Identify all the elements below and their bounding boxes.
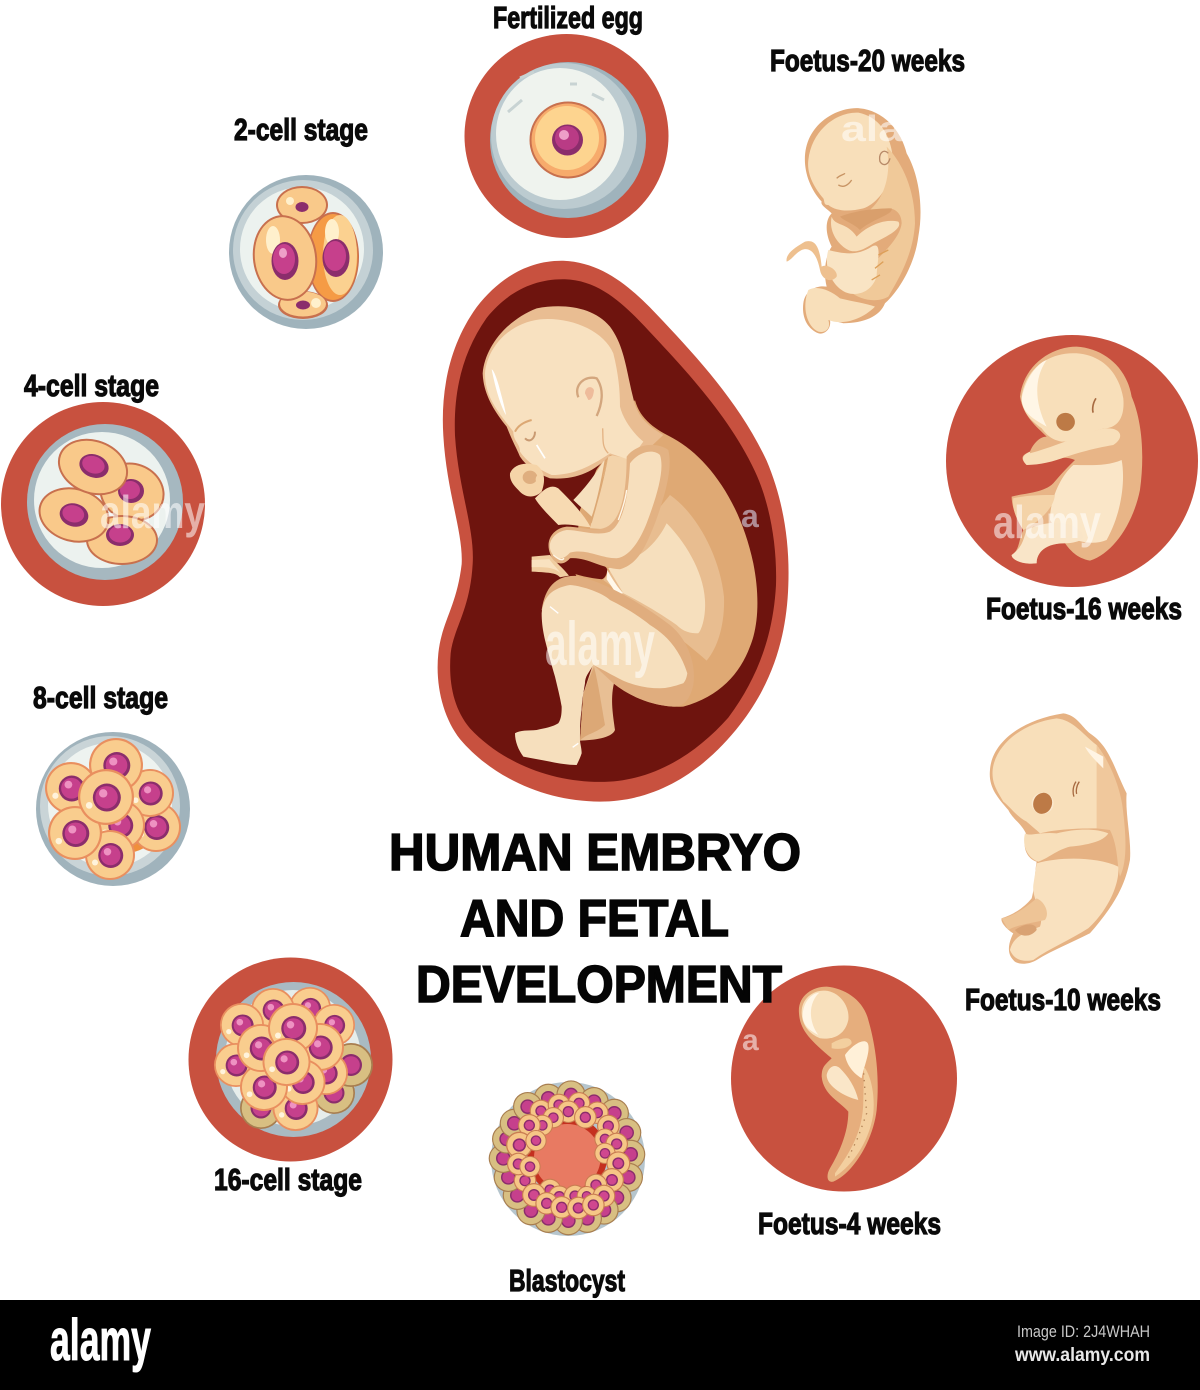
- foetus figure: [483, 306, 757, 765]
- label: fertilized egg: Fertilized egg: [493, 0, 643, 35]
- watermark: centre: alamy: [545, 610, 655, 679]
- title: HUMAN EMBRYO: [389, 824, 801, 882]
- umbilical cord: [532, 555, 569, 577]
- upper arm and forearm: [549, 445, 670, 569]
- label: foetus 4 weeks: Foetus-4 weeks: [758, 1206, 941, 1241]
- panel: foetus 20 weeks: [787, 108, 921, 334]
- watermark: 16-week: alamy: [993, 496, 1101, 548]
- lower arm: [535, 487, 591, 527]
- footer bar: [0, 1300, 1200, 1390]
- label: 16-cell: 16-cell stage: [214, 1162, 362, 1197]
- label: foetus 20 weeks: Foetus-20 weeks: [770, 43, 965, 78]
- title: DEVELOPMENT: [416, 956, 782, 1014]
- title: AND FETAL: [460, 890, 729, 948]
- womb: [438, 261, 789, 802]
- head rim: [483, 306, 663, 479]
- hand at mouth: [510, 464, 544, 496]
- footer bar: www.alamy.com: [1014, 1345, 1150, 1366]
- panel: blastocyst: [489, 1080, 645, 1236]
- label: 4-cell: 4-cell stage: [24, 368, 159, 403]
- chest: [590, 450, 630, 530]
- panel: foetus 16 weeks: [946, 335, 1198, 587]
- panel: foetus 10 weeks: [990, 713, 1130, 964]
- head: [485, 319, 643, 475]
- thigh and front leg: [542, 576, 694, 707]
- limb gaps: [548, 454, 608, 579]
- label: 2-cell: 2-cell stage: [234, 112, 368, 147]
- panel: foetus 4 weeks: [731, 966, 957, 1192]
- watermark: 4-cell: alamy: [100, 486, 205, 538]
- label: 8-cell: 8-cell stage: [33, 680, 168, 715]
- watermark: 20-week: ala: [841, 108, 904, 149]
- panel: fertilized egg: [464, 34, 668, 238]
- panel: 16-cell stage: [188, 958, 392, 1162]
- panel: 8-cell stage: [36, 732, 190, 886]
- panel: 2-cell stage: [229, 175, 383, 329]
- watermark letter: a: [741, 498, 759, 534]
- title: [389, 824, 801, 1014]
- panel: 4-cell stage: [1, 402, 205, 606]
- label: blastocyst: Blastocyst: [509, 1263, 625, 1298]
- footer bar: Image ID: 2J4WHAH: [1017, 1322, 1150, 1341]
- footer bar: alamy: [50, 1308, 151, 1373]
- panel: central foetus in womb: [438, 261, 789, 802]
- watermark letter: a: [742, 1024, 759, 1057]
